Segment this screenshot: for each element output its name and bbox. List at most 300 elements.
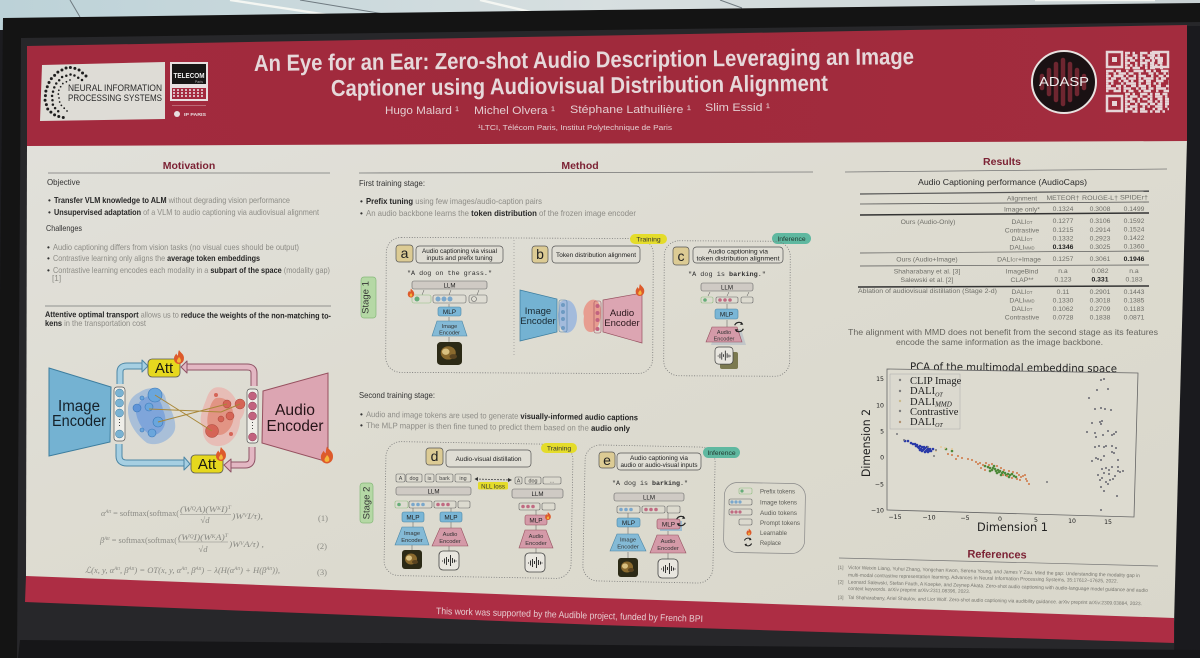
results table: 0.1360 — [1124, 244, 1145, 250]
sub-diagram d: audio-visual distillation: Audio-visual distillation — [456, 456, 522, 463]
results table: Ablation of audiovisual distillation (Stage 2-d) — [858, 288, 997, 295]
results table: 0.1346 — [1053, 244, 1074, 251]
authors: Michel Olvera ¹ — [474, 105, 555, 117]
reference list: [1] — [838, 565, 844, 571]
y axis ticks: 15 — [876, 376, 884, 383]
audio tokens column — [247, 389, 258, 443]
equation 2: Att — [103, 537, 110, 542]
sub-diagram e: audio or audio-visual inference: MLP — [622, 520, 635, 527]
y axis ticks: 10 — [876, 402, 884, 410]
second training stage text: Audio and image tokens are used to generate visually-informed audio captions — [366, 410, 638, 422]
results table: 0.1257 — [1053, 256, 1074, 263]
y axis ticks: 0 — [880, 454, 884, 462]
logo: Telecom Paris: Paris — [195, 80, 203, 84]
logo: Neural Information Processing Systems — [40, 62, 165, 121]
equation 3: )), — [271, 565, 280, 575]
results table: ImageBind — [1006, 268, 1038, 276]
second training stage text — [359, 391, 638, 433]
sub-diagram e: audio or audio-visual inference: Audio captioning via — [630, 455, 689, 462]
challenges text: Contrastive learning only aligns the average token embeddings — [53, 254, 260, 263]
equation 3 — [85, 565, 327, 577]
legend: token types — [723, 482, 806, 554]
reference list: Victor Weixin Liang, Yuhui Zhang, Yongchan Kwon, Serena Young, and James Y Zou. Mind the gap: Understanding the modality gap in — [848, 565, 1140, 579]
x axis ticks: 5 — [1034, 517, 1038, 524]
chart legend — [890, 374, 962, 429]
footer acknowledgement: This work was supported by the Audible project, funded by French BPI — [436, 606, 703, 624]
chart legend: DALI — [910, 386, 935, 397]
results table: 0.1330 — [1053, 298, 1074, 304]
icons: learnable flames — [174, 350, 333, 464]
results table: DALIMMD — [1009, 244, 1035, 252]
reference list — [838, 565, 1148, 607]
x axis ticks: 0 — [998, 516, 1002, 523]
equation 3: ℒ(x, y, α — [85, 565, 114, 575]
first training stage text: • — [360, 209, 363, 218]
equation 2: β — [100, 535, 104, 545]
results table — [858, 191, 1149, 322]
results table: DALIOT+Image — [997, 256, 1041, 264]
venue background — [0, 0, 1200, 30]
y axis ticks: 5 — [880, 428, 884, 436]
attention block: bottom: Att — [198, 456, 217, 473]
equation 3: Att — [195, 567, 202, 572]
sub-diagram e: audio or audio-visual inference: Encoder — [657, 546, 679, 552]
sub-diagram e: audio or audio-visual inference: Image — [620, 538, 636, 544]
second training stage text: • — [360, 421, 363, 430]
image encoder — [49, 368, 111, 456]
logo: Neural Information Processing Systems: PROCESSING SYSTEMS — [68, 92, 162, 103]
results table: SPIDEr† — [1120, 194, 1148, 202]
equation 1: A)(W — [195, 504, 218, 514]
sub-diagram e: audio or audio-visual inference: e — [603, 452, 611, 468]
audio encoder: Audio — [275, 402, 315, 419]
sub-diagram a: prefix tuning: a — [401, 245, 409, 261]
sub-diagram d: audio-visual distillation: dog — [410, 476, 418, 482]
image encoder: Image — [58, 398, 100, 415]
results table: 0.1324 — [1053, 206, 1074, 213]
equation 2: = softmax(softmax( — [110, 535, 177, 545]
sub-diagram e: audio or audio-visual inference: Audio — [661, 539, 675, 545]
chart legend: CLIP Image — [910, 376, 962, 387]
sub-diagram e: audio or audio-visual inference: "A dog is barking ." — [612, 480, 688, 487]
results table: 0.1524 — [1124, 226, 1145, 234]
legend: token types: Prompt tokens — [760, 520, 800, 527]
sub-diagram d: audio-visual distillation: ... — [550, 478, 554, 484]
results table: 0.331 — [1091, 276, 1109, 284]
results table: DALIMMD — [1009, 298, 1035, 304]
authors: Slim Essid ¹ — [705, 102, 770, 114]
results table: 0.1183 — [1124, 306, 1144, 313]
heading: Motivation: Motivation — [163, 160, 215, 172]
results table: Ours (Audio+Image) — [896, 256, 958, 264]
label: Stage 1: Stage 1 — [360, 281, 372, 314]
heading: Method: Method — [561, 160, 599, 172]
results table: 0.3106 — [1090, 218, 1111, 225]
results table: 0.1499 — [1124, 206, 1145, 213]
challenges text: • — [47, 254, 50, 263]
equation 2: A/τ) , — [243, 539, 264, 549]
results note: The alignment with MMD does not benefit from the second stage as its features — [848, 327, 1158, 337]
sub-diagram a: prefix tuning: Image — [442, 324, 457, 330]
x axis ticks: −5 — [960, 515, 970, 522]
results table: 0.11 — [1057, 289, 1070, 296]
equation 2: Q — [189, 535, 194, 540]
equation 2 — [99, 532, 327, 554]
attentive optimal transport text: kens in the transportation cost — [45, 319, 147, 328]
challenges text: Challenges — [46, 224, 82, 233]
logo: Neural Information Processing Systems: NEURAL INFORMATION — [68, 82, 162, 93]
results table: 0.183 — [1125, 276, 1143, 284]
results table: 0.3061 — [1090, 256, 1111, 263]
equation 3: Att — [180, 567, 188, 572]
x axis ticks: −10 — [922, 514, 936, 522]
equation 3: (3) — [317, 567, 327, 577]
points: DALI OT All — [905, 441, 933, 452]
x axis ticks: 10 — [1068, 518, 1076, 525]
equation 1: I/τ), — [246, 511, 263, 521]
label: Stage 2: Stage 2 — [362, 487, 372, 519]
sub-diagram a: prefix tuning — [396, 245, 503, 365]
challenges text: [1] — [52, 274, 61, 283]
sub-diagram a: prefix tuning: LLM — [443, 282, 456, 290]
reference list: Tal Shaharabany, Ariel Shaulov, and Lior Wolf. Zero-shot audio captioning via audibility guidance. arXiv preprint arXiv:2309.03884, 2023. — [848, 595, 1142, 607]
equation 1: T — [228, 506, 232, 511]
sub-diagram d: audio-visual distillation: LLM — [427, 488, 440, 496]
equation 3: Att — [128, 567, 135, 572]
title — [254, 43, 914, 101]
points: DALI OT and contrastive — [946, 449, 1016, 477]
sub-diagram c: inference via alignment: MLP — [720, 312, 733, 318]
first training stage text: An audio backbone learns the token distribution of the frozen image encoder — [366, 209, 636, 218]
sub-diagram a: prefix tuning: Encoder — [439, 330, 460, 336]
chart legend: MMD — [934, 400, 952, 408]
results table: 0.1385 — [1124, 298, 1145, 304]
equation 1: K — [216, 507, 222, 512]
equation 1: = softmax(softmax( — [111, 508, 179, 518]
results table: Salewski et al. [2] — [901, 277, 954, 284]
reference list: multi-modal contrastive representation learning. Advances in Neural Information Processing Systems, 35:17612–17625, 2022. — [848, 573, 1118, 585]
results table: 0.1946 — [1124, 256, 1145, 263]
sub-diagram c: inference via alignment: Audio — [717, 330, 731, 336]
points: CLIP image — [1087, 379, 1123, 510]
sub-diagram b: token distribution alignment: Token distribution alignment — [556, 252, 636, 259]
authors: Hugo Malard ¹ — [385, 105, 459, 117]
equation 3: ) = OT(x, y, α — [133, 565, 182, 575]
results table: 0.0728 — [1053, 314, 1074, 322]
audio encoder: Encoder — [266, 418, 324, 435]
equation 3: , β — [120, 565, 129, 575]
results note — [848, 327, 1158, 347]
objective text: • — [48, 208, 51, 217]
results table: 0.1277 — [1053, 218, 1074, 225]
equation 3: ) + H(β — [239, 565, 267, 575]
objective text — [47, 178, 320, 217]
tag: training: Training — [636, 236, 661, 244]
logo: Telecom Paris — [170, 62, 208, 118]
sub-diagram d: audio-visual distillation: Encoder — [401, 538, 423, 544]
panel outline: a and b — [386, 237, 653, 374]
results table: 0.1592 — [1124, 218, 1145, 225]
attention block: top: Att — [155, 360, 174, 377]
sub-diagram a: prefix tuning: inputs and prefix tuning — [426, 255, 493, 262]
diagram: attentive optimal transport — [49, 350, 333, 473]
logo: Telecom Paris: IP PARIS — [184, 112, 207, 118]
panel: method — [359, 160, 813, 583]
points: DALI MMD and orange series — [948, 454, 1029, 484]
attention block: bottom — [191, 455, 223, 473]
results table: METEOR† — [1046, 195, 1080, 202]
results table: Alignment — [1007, 196, 1037, 202]
x axis ticks: −15 — [888, 514, 902, 521]
sub-diagram d: audio-visual distillation: MLP — [406, 514, 420, 522]
sub-diagram d: audio-visual distillation: Encoder — [439, 539, 461, 545]
equation 1: √d — [201, 515, 210, 525]
sub-diagram a: prefix tuning: Audio captioning via visual — [422, 248, 497, 255]
panel: motivation — [45, 160, 331, 328]
affiliation: ¹LTCI, Télécom Paris, Institut Polytechnique de Paris — [478, 123, 672, 132]
sub-diagram c: inference via alignment: c — [678, 248, 684, 264]
results table: 0.1062 — [1053, 306, 1074, 313]
equation 1: (W — [180, 504, 190, 514]
heading: Results: Results — [983, 156, 1021, 168]
second training stage text: Second training stage: — [359, 391, 435, 400]
results table: 0.1422 — [1124, 235, 1145, 242]
chart legend: OT — [935, 423, 943, 429]
attentive optimal transport text: Attentive optimal transport allows us to reduce the weights of the non-matching to- — [45, 310, 331, 320]
chart legend: Contrastive — [910, 407, 959, 418]
results table: 0.3008 — [1090, 206, 1111, 213]
equation 2: )W — [229, 539, 239, 549]
image encoder: Encoder — [52, 413, 106, 430]
sub-diagram b: token distribution alignment — [520, 246, 644, 343]
sub-diagram d: audio-visual distillation: MLP — [444, 514, 458, 522]
y axis ticks — [871, 376, 884, 514]
equation 1: α — [101, 508, 105, 518]
legend: token types: Audio tokens — [760, 510, 797, 517]
challenges text: • — [47, 266, 50, 275]
sub-diagram b: token distribution alignment: b — [536, 246, 544, 262]
equation 1: I) — [220, 504, 228, 514]
equation 3: Att — [113, 567, 121, 572]
table title: Audio Captioning performance (AudioCaps) — [918, 177, 1087, 187]
chart: PCA scatter plot: PCA of the multimodal embedding space — [910, 361, 1117, 375]
image tokens column — [114, 387, 125, 441]
challenges text: Audio captioning differs from vision tasks (no visual cues should be output) — [53, 243, 299, 252]
results table: Image only* — [1004, 206, 1040, 214]
second training stage text: • — [360, 410, 363, 419]
results table: n.a — [1058, 268, 1068, 275]
results table: 0.1215 — [1053, 227, 1074, 234]
arrows to attention blocks — [119, 360, 254, 472]
equation 1 — [101, 504, 328, 525]
sub-diagram d: audio-visual distillation: Encoder — [525, 541, 547, 547]
results table: 0.1443 — [1124, 289, 1145, 296]
equation 3: ) − λ(H(α — [200, 565, 235, 575]
sub-diagram e: audio or audio-visual inference — [583, 445, 740, 583]
sub-diagram d: audio-visual distillation: Training — [547, 446, 571, 452]
equation 2: I)(W — [192, 532, 213, 542]
tag: training — [630, 234, 667, 244]
attentive optimal transport text — [45, 310, 331, 328]
first training stage text — [359, 179, 636, 218]
sub-diagram d: audio-visual distillation: NLL loss — [481, 483, 505, 490]
attention block: top — [148, 359, 180, 377]
transport lines — [149, 395, 240, 431]
sub-diagram d: audio-visual distillation: bark — [439, 476, 450, 482]
reference list: Leonard Salewski, Stefan Fauth, A Koepke, and Zeynep Akata. Zero-shot audio captioning with audio-language model guidance and audio — [848, 580, 1148, 594]
sub-diagram d: audio-visual distillation: ing — [459, 476, 467, 482]
sub-diagram d: audio-visual distillation: Audio — [443, 532, 457, 538]
chart: PCA scatter plot: Dimension 2 — [859, 409, 873, 477]
sub-diagram c: inference via alignment: "A dog is barking ." — [688, 271, 766, 278]
tag: inference — [772, 233, 811, 244]
legend: token types: Replace — [760, 540, 781, 547]
results table: Ours (Audio-Only) — [901, 219, 955, 226]
sub-diagram c: inference via alignment: Encoder — [714, 336, 735, 342]
x axis ticks: 15 — [1104, 519, 1112, 526]
results table: DALIOT — [1012, 236, 1033, 243]
sub-diagram d: audio-visual distillation — [384, 441, 577, 579]
equation 2: A) — [214, 532, 225, 542]
label: Stage 2 — [360, 483, 373, 523]
tag: inference: Inference — [777, 236, 806, 243]
logo: ADASP — [1032, 51, 1096, 113]
results table: 0.2901 — [1090, 289, 1111, 296]
heading: References: References — [967, 548, 1027, 562]
sub-diagram c: inference via alignment: Audio captioning via — [708, 248, 769, 256]
equation 2: V — [240, 542, 245, 547]
results table: 0.3025 — [1090, 244, 1111, 251]
results table: CLAP** — [1010, 277, 1034, 284]
results table: DALIOT — [1012, 289, 1033, 296]
sub-diagram d: audio-visual distillation: MLP — [529, 518, 543, 524]
results table: 0.1332 — [1053, 236, 1074, 242]
reference list: context keywords. arXiv preprint arXiv:2311.08396, 2023. — [848, 586, 970, 595]
sub-diagram d: audio-visual distillation: LLM — [531, 491, 544, 498]
logo: ADASP: ADASP — [1039, 75, 1089, 89]
title: Captioner using Audiovisual Distribution Alignment — [331, 70, 828, 101]
challenges text: Contrastive learning encodes each modality in a subpart of the space (modality gap) — [53, 266, 330, 275]
sub-diagram e: audio or audio-visual inference: audio or audio-visual inputs — [620, 462, 698, 469]
objective text: • — [48, 196, 51, 205]
chart: PCA scatter plot — [859, 361, 1138, 534]
results note: encode the same information as the image backbone. — [896, 337, 1103, 347]
results table: Contrastive — [1005, 228, 1039, 234]
legend: token types: Image tokens — [760, 500, 797, 506]
audio token distribution — [201, 387, 245, 446]
equation 2: (2) — [317, 541, 327, 551]
challenges text — [46, 224, 330, 283]
results table: 0.2923 — [1090, 236, 1111, 242]
sub-diagram d: audio-visual distillation: A — [399, 476, 403, 482]
results table: 0.0871 — [1124, 314, 1145, 322]
objective text: Transfer VLM knowledge to ALM without degrading vision performance — [54, 196, 290, 205]
equation 2: √d — [199, 544, 208, 554]
results table: Contrastive — [1005, 314, 1039, 322]
y axis ticks: −10 — [871, 508, 884, 514]
results table: 0.1838 — [1090, 314, 1111, 322]
legend: token types: Prefix tokens — [760, 488, 795, 496]
equation 1: (1) — [318, 513, 328, 523]
results table: DALIOT — [1012, 306, 1033, 313]
sub-diagram d: audio-visual distillation: Image — [404, 531, 420, 537]
equation 3: Att — [265, 567, 273, 572]
results table: ROUGE-L† — [1082, 195, 1118, 202]
results table: DALIOT — [1012, 219, 1033, 226]
equation 1: Att — [104, 510, 112, 515]
equation 2: (W — [178, 532, 188, 542]
sub-diagram a: prefix tuning: MLP — [443, 309, 456, 316]
equation 2: T — [225, 534, 229, 539]
QR code — [1106, 52, 1169, 112]
sub-diagram d: audio-visual distillation: dog — [528, 478, 538, 484]
authors — [385, 102, 770, 117]
first training stage text: • — [360, 197, 363, 206]
panel: results — [838, 156, 1167, 607]
sub-diagram d: audio-visual distillation: d — [431, 448, 438, 464]
sub-diagram b: token distribution alignment: Audio — [610, 308, 634, 319]
sub-diagram d: audio-visual distillation: Audio — [529, 534, 543, 540]
title: An Eye for an Ear: Zero-shot Audio Description Leveraging an Image — [254, 43, 914, 76]
footer band — [25, 576, 1174, 643]
sub-diagram b: token distribution alignment: Image — [525, 306, 551, 317]
sub-diagram e: audio or audio-visual inference: LLM — [643, 494, 655, 502]
sub-diagram d: audio-visual distillation: A — [517, 478, 521, 484]
second training stage text: The MLP mapper is then fine tuned to predict them based on the audio only — [366, 421, 630, 433]
objective text: Objective — [47, 178, 80, 187]
chart legend: DALI — [910, 417, 935, 428]
results table: 0.3018 — [1090, 298, 1111, 304]
axis labels: Dimension 1 — [977, 520, 1048, 534]
results table: 0.082 — [1091, 268, 1109, 275]
audio encoder — [262, 373, 328, 462]
y axis ticks: −5 — [875, 482, 884, 488]
equation 1: Q — [192, 507, 196, 512]
equation 2: K — [210, 535, 216, 540]
equation 1: )W — [232, 511, 242, 521]
challenges text: • — [47, 243, 50, 252]
first training stage text: Prefix tuning using few images/audio-caption pairs — [366, 197, 542, 206]
chart legend: OT — [935, 392, 943, 398]
results table: 0.2709 — [1090, 306, 1111, 313]
legend: token types: Learnable — [760, 530, 787, 537]
equations — [85, 504, 328, 577]
logo: Telecom Paris: TELECOM — [174, 71, 205, 80]
sub-diagram c: inference via alignment — [664, 241, 790, 376]
sub-diagram e: audio or audio-visual inference: MLP — [662, 522, 675, 528]
sub-diagram b: token distribution alignment: Encoder — [604, 318, 640, 329]
chart legend: DALI — [910, 397, 935, 408]
reference list: [3] — [838, 595, 844, 601]
header band — [27, 25, 1187, 146]
authors: Stéphane Lathuilière ¹ — [570, 104, 691, 116]
results table: n.a — [1129, 268, 1139, 275]
sub-diagram e: audio or audio-visual inference: Inference — [707, 450, 736, 457]
x axis ticks — [888, 514, 1112, 526]
objective text: Unsupervised adaptation of a VLM to audio captioning via audiovisual alignment — [54, 208, 320, 217]
sub-diagram c: inference via alignment: token distribution alignment — [696, 256, 780, 262]
sub-diagram a: prefix tuning: "A dog on the grass." — [407, 270, 492, 277]
label: Stage 1 — [360, 277, 376, 318]
sub-diagram d: audio-visual distillation: is — [428, 476, 432, 482]
results table: Shaharabany et al. [3] — [894, 268, 960, 276]
equation 1: V — [244, 514, 248, 519]
results table: 0.2914 — [1090, 227, 1111, 234]
sub-diagram e: audio or audio-visual inference: Encoder — [617, 544, 639, 550]
equation 3: Att — [233, 567, 241, 572]
results table: 0.123 — [1054, 276, 1072, 284]
equation 3: , β — [187, 565, 196, 575]
